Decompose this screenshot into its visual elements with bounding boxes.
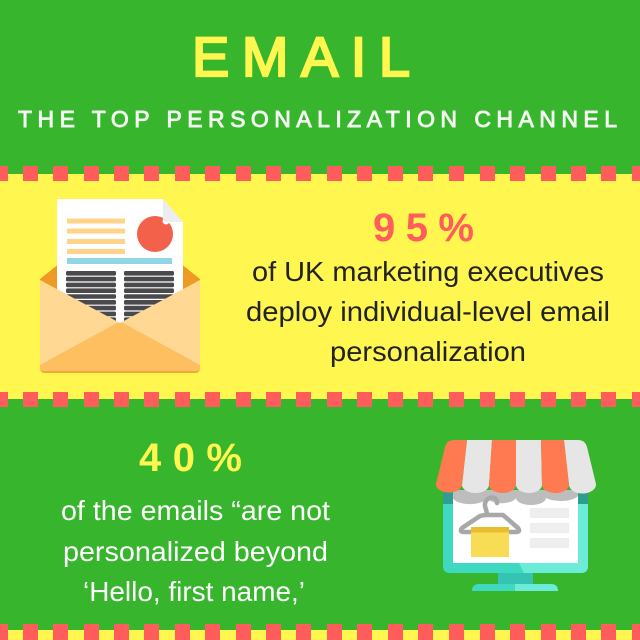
panel: yellow band	[0, 174, 640, 399]
monitor body	[443, 490, 588, 573]
dashed border: bottom	[0, 624, 640, 640]
stat: 40%: 40%	[139, 436, 242, 480]
text block: UK executives: of UK marketing executives	[252, 256, 604, 287]
text block: UK executives: deploy individual-level email	[246, 296, 610, 327]
text block: UK executives	[246, 256, 610, 367]
bottom yellow strip	[0, 630, 640, 640]
icon: online shop monitor	[436, 440, 596, 591]
subtitle: THE TOP PERSONALIZATION CHANNEL	[18, 106, 617, 132]
text block: not personalized: of the emails “are not	[61, 495, 330, 526]
hanger and shirt	[461, 497, 519, 532]
monitor stand	[498, 572, 533, 585]
stat: 95%: 95%	[373, 206, 474, 250]
text block: UK executives: personalization	[330, 336, 526, 367]
text block: not personalized	[61, 495, 330, 607]
product list rows	[530, 508, 569, 548]
dashed border: middle	[0, 392, 640, 407]
panel: header	[18, 25, 617, 132]
title: EMAIL	[192, 25, 410, 88]
dashed border: top	[0, 166, 640, 181]
awning	[462, 440, 492, 493]
icon: open envelope with letter	[40, 199, 200, 373]
text block: not personalized: personalized beyond	[63, 536, 328, 567]
text block: not personalized: ‘Hello, first name,’	[83, 576, 305, 607]
awning shadow	[453, 490, 578, 505]
